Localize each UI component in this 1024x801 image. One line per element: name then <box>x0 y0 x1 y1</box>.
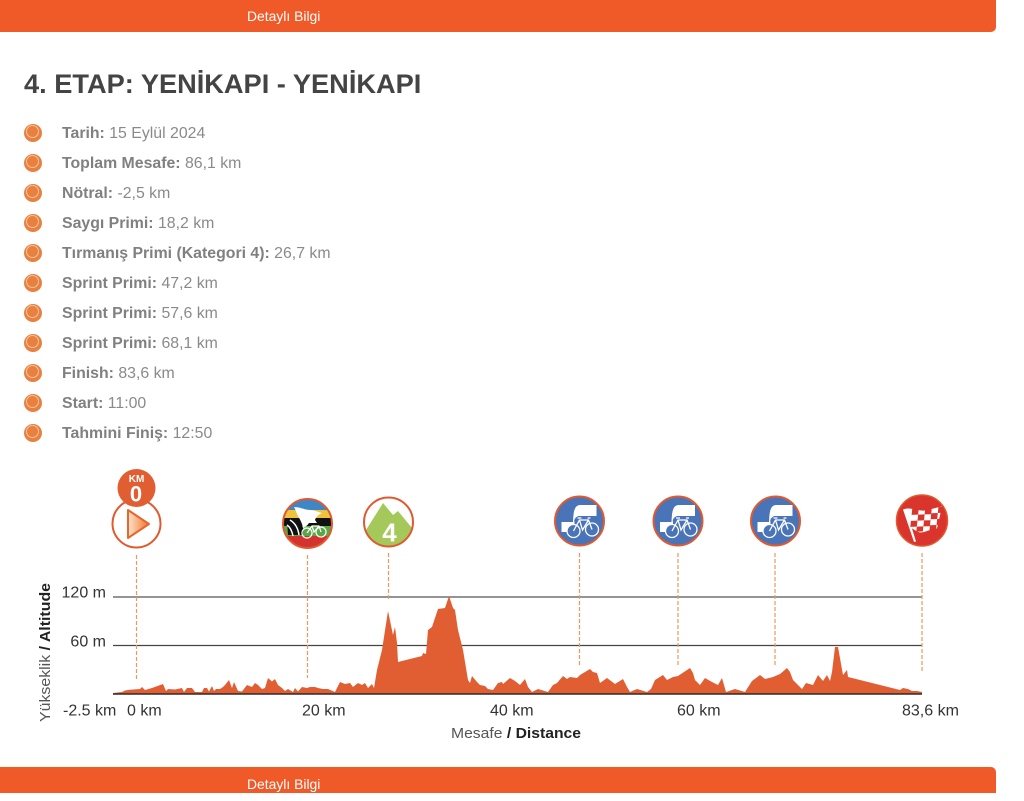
y axis labels <box>62 584 106 650</box>
detail: sprint 3: Sprint Primi: 68,1 km <box>62 335 218 352</box>
top button bar: Detaylı Bilgi <box>247 8 320 24</box>
detail: date: Tarih: 15 Eylül 2024 <box>62 125 205 142</box>
icon: sprint 3 <box>751 496 800 546</box>
x axis title: Mesafe / Distance <box>451 726 581 742</box>
detail: start <box>24 394 146 412</box>
y axis title: Yükseklik / Altitude <box>38 583 54 722</box>
icon: sprint 2 <box>654 496 702 546</box>
x axis labels: 40 km <box>490 702 534 720</box>
elevation profile chart <box>39 469 958 738</box>
detail: climb prime: Tırmanış Primi (Kategori 4): 26,7 km <box>62 245 331 262</box>
icon: climb category 4: 4 <box>382 518 397 548</box>
top button bar <box>0 0 996 32</box>
icon: start play <box>112 500 160 548</box>
icon: km 0 badge: 0 <box>130 482 142 506</box>
detail: estimated finish: Tahmini Finiş: 12:50 <box>62 425 212 442</box>
icon: sprint 1 <box>555 496 604 546</box>
icon: km 0 badge: KM <box>129 474 144 485</box>
x axis labels <box>63 702 959 720</box>
stage details list <box>24 124 331 442</box>
detail: start: Start: 11:00 <box>62 395 146 412</box>
title: 4. ETAP: YENİKAPI - YENİKAPI <box>24 68 421 99</box>
elevation area <box>113 596 922 694</box>
y axis labels: 60 m <box>70 634 106 650</box>
x axis labels: 0 km <box>127 702 162 720</box>
bottom button bar <box>0 767 996 793</box>
gridlines <box>113 597 922 646</box>
detail: neutral <box>24 184 170 202</box>
x axis labels: -2.5 km <box>63 702 116 720</box>
detail: finish: Finish: 83,6 km <box>62 365 175 382</box>
x axis labels: 20 km <box>302 702 346 720</box>
icon: km 0 badge <box>118 469 156 507</box>
marker guide lines <box>136 553 922 680</box>
x axis labels: 60 km <box>677 702 721 720</box>
detail: total distance: Toplam Mesafe: 86,1 km <box>62 155 241 172</box>
x axis labels: 83,6 km <box>902 702 959 720</box>
baseline <box>113 693 922 695</box>
detail: sprint 1: Sprint Primi: 47,2 km <box>62 275 218 292</box>
bottom button bar: Detaylı Bilgi <box>247 776 320 792</box>
y axis labels: 120 m <box>62 584 106 602</box>
detail: sprint 2: Sprint Primi: 57,6 km <box>62 305 218 322</box>
detail: tribute prime: Saygı Primi: 18,2 km <box>62 215 214 232</box>
icon: finish flag <box>896 495 948 546</box>
icon: climb category 4 <box>364 498 413 548</box>
icon: tribute prime <box>282 498 334 549</box>
detail: neutral: Nötral: -2,5 km <box>62 185 170 202</box>
